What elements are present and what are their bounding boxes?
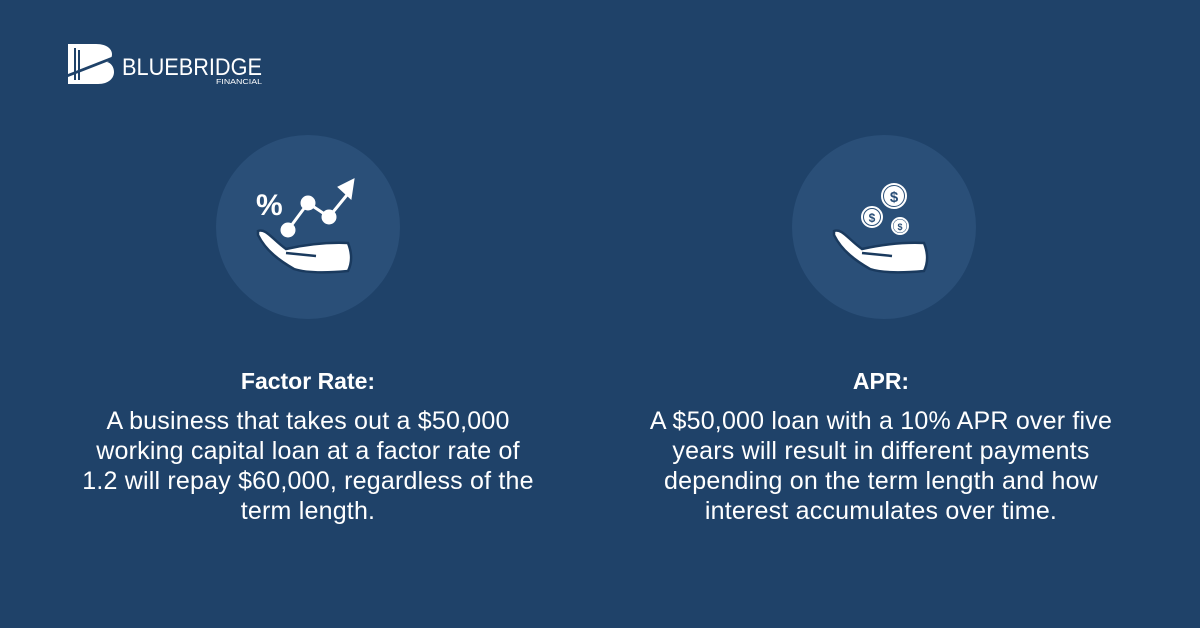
panel: APR icon circle: $ [897,222,903,232]
icon: bridge B [68,44,114,84]
text block: APR: APR: [853,368,909,394]
icon: hand [258,230,351,272]
text block: factor rate: 1.2 will repay $60,000, regardless of the [82,467,534,495]
text block: factor rate: term length. [241,497,375,525]
text block: APR: interest accumulates over time. [705,497,1057,525]
text block: factor rate: Factor Rate: [241,368,375,394]
logo: BLUEBRIDGE [122,54,262,81]
text block: APR [650,368,1112,525]
text block: APR: years will result in different payments [672,437,1090,465]
text block: factor rate: working capital loan at a factor rate of [96,437,520,465]
panel: APR icon circle: $ [890,189,899,206]
icon: percent chart: % [256,189,283,222]
panel: APR icon circle [792,135,976,319]
icon: percent chart [256,179,354,237]
icon: coins [862,184,908,234]
panel: factor rate icon circle [216,135,400,319]
icon: hand [834,230,927,272]
text block: APR: depending on the term length and how [664,467,1098,495]
panel: APR icon circle: $ [869,211,876,225]
logo [68,44,262,84]
text block: APR: A $50,000 loan with a 10% APR over five [650,407,1112,435]
text block: factor rate [82,368,534,525]
text block: factor rate: A business that takes out a $50,000 [106,407,510,435]
